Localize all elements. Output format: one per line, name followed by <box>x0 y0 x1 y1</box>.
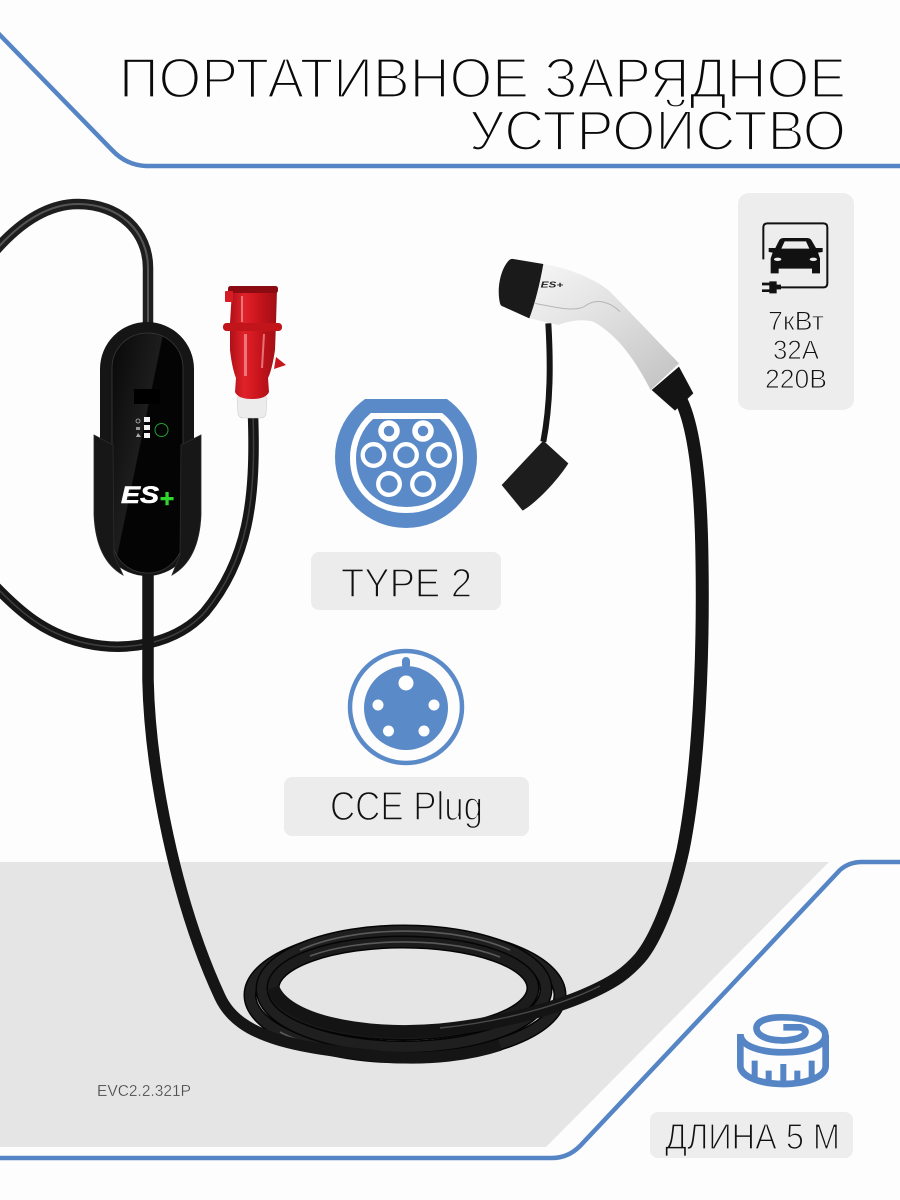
handle logo: ES+ <box>541 279 563 289</box>
socket pins <box>363 423 450 495</box>
title <box>119 46 846 163</box>
holder left wing <box>94 435 123 575</box>
spec: power: 7кВт <box>768 306 824 336</box>
charger screen <box>112 333 183 573</box>
cable: loop above charger <box>0 204 148 330</box>
plug collar <box>223 323 282 331</box>
blue header line <box>0 33 900 166</box>
title: ПОРТАТИВНОЕ ЗАРЯДНОЕ <box>119 46 846 110</box>
coil middle ring <box>262 931 546 1047</box>
CCE inner disc <box>364 666 448 750</box>
logo ES+: ES <box>121 482 159 509</box>
plug strain relief <box>237 397 267 418</box>
CCE pins <box>372 676 440 736</box>
blue footer line <box>0 862 900 1158</box>
model number: EVC2.2.321P <box>97 1083 191 1100</box>
protective cap <box>502 441 568 511</box>
title: УСТРОЙСТВО <box>469 98 846 163</box>
icon: car charging <box>762 223 827 293</box>
cable: from plug looping under charger <box>0 415 254 647</box>
CCE outer ring <box>350 651 462 763</box>
label: length 5 m: ДЛИНА 5 М <box>665 1116 840 1157</box>
coil outer ring <box>250 933 560 1057</box>
plug shine <box>241 296 265 376</box>
label: TYPE 2: TYPE 2 <box>341 560 472 606</box>
strain collar <box>652 367 693 411</box>
spec: voltage: 220В <box>765 364 827 394</box>
coil highlights <box>280 931 510 1056</box>
CCE key notch <box>402 657 410 669</box>
icon: type 2 socket <box>335 386 477 528</box>
icon: tape measure <box>740 1017 826 1084</box>
red CCE plug <box>223 286 286 418</box>
socket disc <box>335 386 477 528</box>
charger body <box>100 322 194 576</box>
connector handle <box>499 259 693 511</box>
socket inner ring <box>353 416 460 510</box>
cap tether <box>543 323 550 442</box>
cable coil <box>250 931 560 1057</box>
spec: current: 32А <box>773 335 819 365</box>
label: CCE Plug <box>284 777 529 836</box>
icon: CCE plug socket <box>350 651 462 763</box>
gray floor panel <box>0 862 829 1147</box>
green button <box>155 424 168 436</box>
white handle <box>530 264 679 390</box>
logo ES+: + <box>160 485 174 513</box>
plug top rim <box>228 286 278 293</box>
status lights <box>136 417 150 438</box>
spec panel <box>738 193 854 410</box>
label: CCE Plug: CCE Plug <box>330 783 483 829</box>
label: TYPE 2 <box>311 552 501 610</box>
holder right wing <box>172 435 201 575</box>
black nozzle ring <box>499 259 543 318</box>
logo ES+ <box>121 482 174 513</box>
charger unit <box>94 322 201 576</box>
connector cable into coil <box>273 398 702 1032</box>
plug body <box>230 290 277 399</box>
spec panel background <box>738 193 854 410</box>
handle crease <box>535 302 620 312</box>
coil inner ring <box>273 942 533 1034</box>
plug tab <box>225 291 233 302</box>
plug trigger <box>274 357 286 369</box>
main cable from charger to coil <box>148 570 500 1058</box>
display <box>134 389 160 404</box>
